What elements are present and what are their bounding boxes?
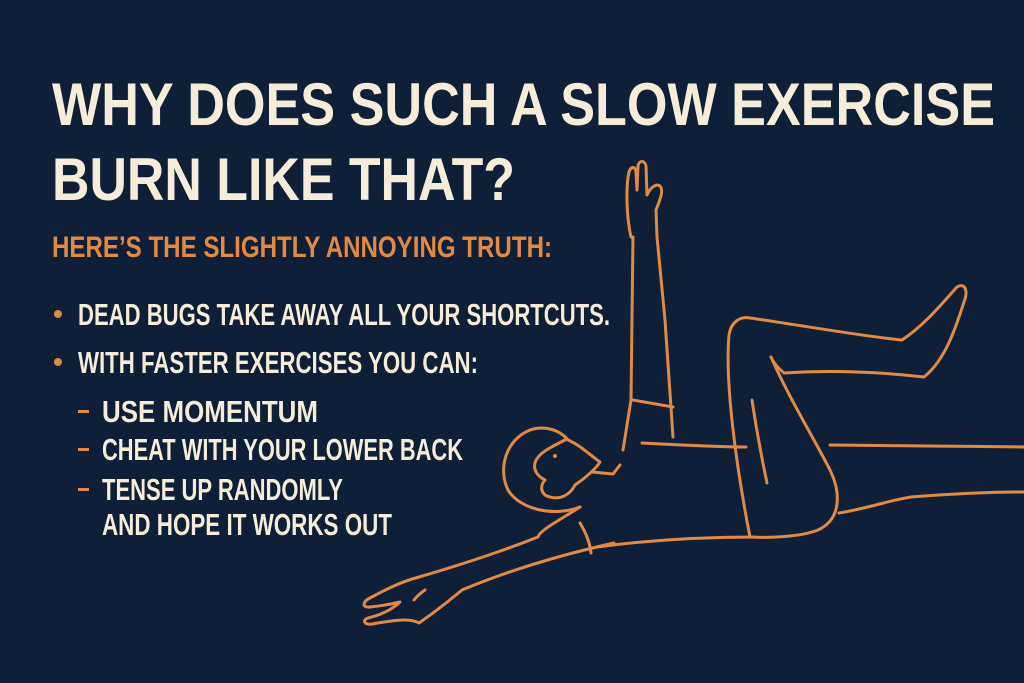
title (52, 71, 995, 213)
sub item 2 (78, 432, 463, 467)
sub item 3 (78, 472, 392, 542)
head (504, 428, 600, 512)
subtitle: HERE’S THE SLIGHTLY ANNOYING TRUTH: (52, 231, 552, 264)
bent leg (728, 286, 966, 537)
extended lower arm (364, 507, 614, 624)
bullet list (54, 297, 610, 542)
bullet 2 (54, 345, 478, 380)
title: BURN LIKE THAT? (52, 146, 515, 213)
torso (642, 443, 746, 447)
illustration: person doing dead bug (364, 162, 1024, 624)
bullet 1: DEAD BUGS TAKE AWAY ALL YOUR SHORTCUTS. (78, 297, 610, 332)
extended leg (839, 492, 1024, 513)
sub item 2: CHEAT WITH YOUR LOWER BACK (102, 432, 463, 467)
sub item 3: AND HOPE IT WORKS OUT (102, 507, 392, 542)
bullet 1 (54, 297, 610, 332)
sub item 3: TENSE UP RANDOMLY (102, 472, 343, 507)
sub item 1: USE MOMENTUM (102, 394, 318, 429)
bullet 2: WITH FASTER EXERCISES YOU CAN: (78, 345, 478, 380)
raised arm and hand (627, 162, 662, 237)
